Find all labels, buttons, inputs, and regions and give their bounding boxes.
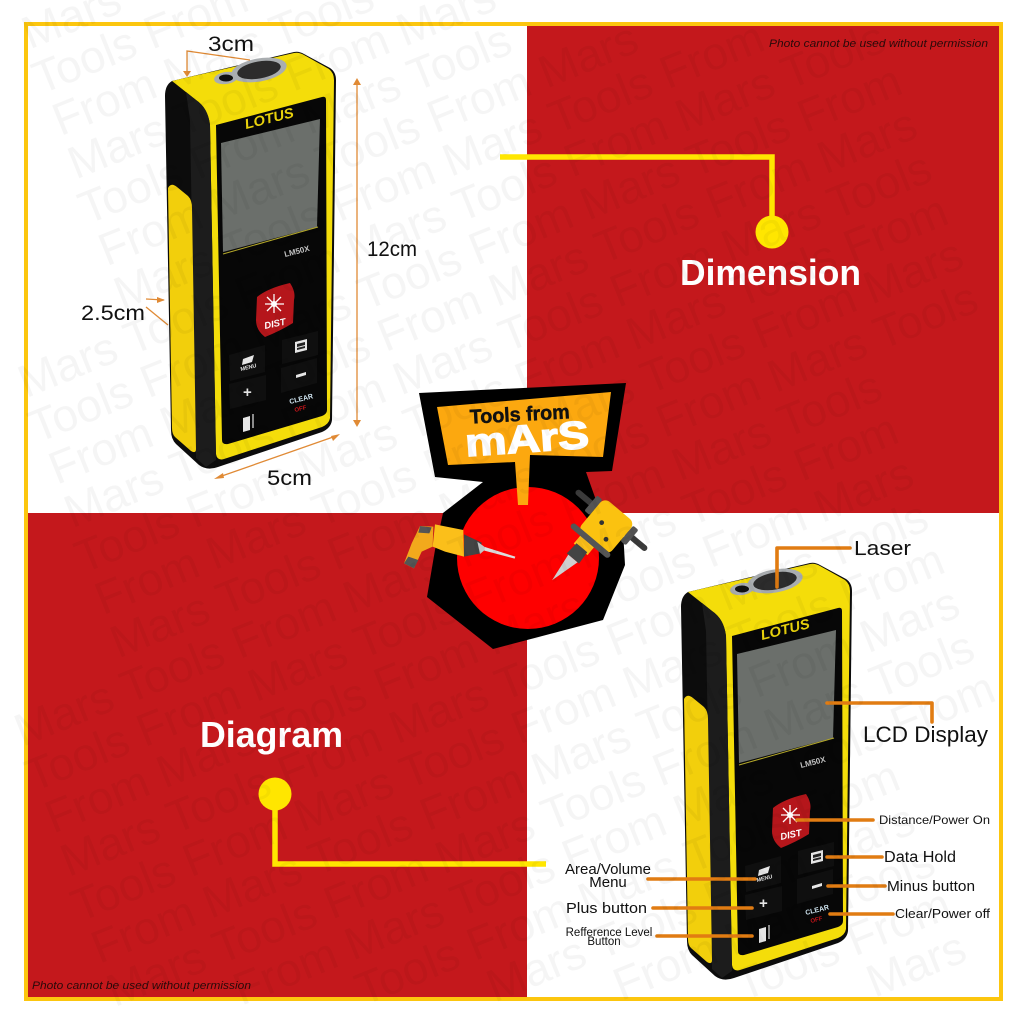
- DIST button: DIST: [779, 827, 804, 843]
- body: [165, 52, 336, 469]
- label: 2.5cm: 2.5cm: [81, 302, 145, 325]
- brand: LOTUS: [759, 615, 812, 643]
- watermark: repeating Tools From Mars: Mars Tools From Mars Tools From Mars Tools: [56, 141, 939, 538]
- device: diagram photo: [681, 563, 852, 980]
- button symbols: +: [759, 895, 768, 912]
- label: 3cm: 3cm: [208, 33, 254, 56]
- lens: [729, 565, 805, 597]
- label: 12cm: 12cm: [367, 238, 417, 261]
- device: dimension photo: [165, 52, 336, 469]
- label: Area/Volume Menu: [565, 861, 651, 891]
- connector: dimension: [500, 157, 788, 248]
- connector: diagram: [258, 778, 546, 864]
- body: [681, 563, 852, 980]
- side rubber shading: [702, 603, 732, 978]
- icon: jackhammer: [522, 481, 655, 614]
- watermark: repeating Tools From Mars: Tools From Mars Tools: [71, 13, 519, 234]
- DIST button: [772, 794, 810, 848]
- watermark: repeating Tools From Mars: From Mars Tools From Mars Tools From Mars: [41, 97, 924, 494]
- screen line: [739, 738, 834, 765]
- note: permission top: Photo cannot be used without permission: [769, 38, 988, 50]
- logo black backing: [419, 383, 626, 649]
- callout leader lines: [648, 548, 932, 936]
- label: Minus button: Minus button: [887, 879, 975, 895]
- lens: [213, 54, 289, 86]
- watermark: repeating Tools From Mars: Tools From Mars Tools From Mars Tools From: [21, 54, 909, 453]
- heading: Dimension: Dimension: [680, 252, 861, 293]
- note: permission bottom: Photo cannot be used without permission: [32, 980, 251, 992]
- screen line: [223, 227, 318, 254]
- watermark: repeating Tools From Mars: Mars Tools From Mars Tools From Mars Tools: [103, 271, 985, 668]
- yellow shell: [688, 564, 850, 970]
- side rubber shading: [186, 92, 216, 467]
- label: Refference Level Button: Refference Level: [566, 927, 652, 939]
- watermark: repeating Tools From Mars: From Mars Tools: [606, 834, 942, 1010]
- front panel: [216, 97, 327, 444]
- button symbols: [240, 339, 314, 432]
- button symbols: [756, 850, 830, 943]
- watermark: repeating Tools From Mars: From Mars Tools From Mars Tools From: [226, 661, 1002, 1015]
- icon: drill: [404, 524, 515, 568]
- label: Data Hold: Data Hold: [884, 849, 956, 866]
- watermark: repeating Tools From Mars: Tools From Mars Tools From Mars Tools From: [17, 403, 905, 802]
- label: Refference Level Button: [566, 927, 652, 948]
- watermark: repeating Tools From Mars: From Mars Tools From Mars Tools From Mars: [84, 576, 966, 973]
- button symbols: +: [243, 384, 252, 401]
- label: Area/Volume Menu: Menu: [589, 874, 627, 891]
- watermark: repeating Tools From Mars: Mars: [859, 921, 973, 1007]
- watermark: repeating Tools From Mars: Tools From Mars Tools From Mars Tools From: [67, 184, 955, 583]
- watermark: repeating Tools From Mars: Tools From: [728, 877, 958, 1011]
- watermark: repeating Tools From Mars: Mars Tools From Mars: [479, 793, 922, 1012]
- button symbols: MENU: [756, 874, 773, 884]
- button symbols: CLEAR: [805, 904, 830, 917]
- label: Laser: Laser: [854, 538, 911, 560]
- label: Clear/Power off: Clear/Power off: [895, 906, 990, 921]
- button symbols: MENU: [240, 363, 257, 373]
- watermark: repeating Tools From Mars: Mars Tools From Mars Tools From Mars Tools: [53, 490, 935, 886]
- button symbols: CLEAR: [289, 393, 314, 406]
- dimension arrowheads: [157, 71, 361, 479]
- watermark: repeating Tools From Mars: Tools From Mars Tools From Mars Tools From: [64, 533, 951, 932]
- brand: LOTUS: [243, 104, 296, 132]
- label: 5cm: 5cm: [267, 467, 312, 490]
- LCD screen: [221, 119, 320, 252]
- DIST button: [256, 283, 294, 337]
- watermark: repeating Tools From Mars: Tools From Mars Tools From: [348, 749, 907, 1015]
- model: LM50X: [283, 244, 311, 259]
- panel: diagram red quadrant: [24, 513, 527, 998]
- button symbols: OFF: [810, 916, 823, 925]
- watermark: repeating Tools From Mars: Mars Tools From Mars Tools From Mars Tools: [7, 359, 889, 756]
- side buttons: [745, 842, 834, 920]
- side grip: [168, 185, 196, 452]
- front panel: [732, 608, 843, 955]
- heading: Diagram: Diagram: [200, 714, 343, 755]
- watermark: repeating Tools From Mars: Mars Tools From Mars Tools From Mars Tools: [99, 620, 981, 1017]
- label: Refference Level Button: Button: [587, 936, 621, 948]
- dimension lines: [146, 51, 357, 477]
- watermark: repeating Tools From Mars: From Mars Tools From Mars Tools From Mars: [37, 446, 920, 843]
- label: Distance/Power On: Distance/Power On: [879, 813, 990, 827]
- logo sign: [437, 392, 611, 505]
- panel: dimension red quadrant: [527, 26, 1000, 513]
- side grip: [684, 696, 712, 963]
- logo: Tools from Mars: [404, 383, 655, 649]
- label: Area/Volume Menu: Area/Volume: [565, 861, 651, 878]
- logo text: Tools from: Tools from: [469, 401, 570, 429]
- watermark: repeating Tools From Mars: Mars Tools From Mars Tools From Mars Tools: [10, 11, 892, 408]
- label: Plus button: Plus button: [566, 901, 647, 917]
- DIST button: DIST: [263, 316, 288, 332]
- label: LCD Display: LCD Display: [863, 722, 988, 747]
- model: LM50X: [799, 755, 827, 770]
- yellow shell: [172, 53, 334, 459]
- logo red disc: [457, 487, 599, 629]
- watermark: repeating Tools From Mars: From Mars Tools From Mars: [91, 11, 645, 276]
- logo text: mArS: mArS: [464, 414, 590, 465]
- LCD screen: [737, 630, 836, 763]
- side buttons: [229, 331, 318, 409]
- watermark: repeating Tools From Mars: From Mars Tools From Mars Tools From Mars: [87, 227, 970, 624]
- button symbols: OFF: [294, 405, 307, 414]
- watermark: repeating Tools From Mars: Mars Tools From Mars Tools From: [106, 10, 771, 319]
